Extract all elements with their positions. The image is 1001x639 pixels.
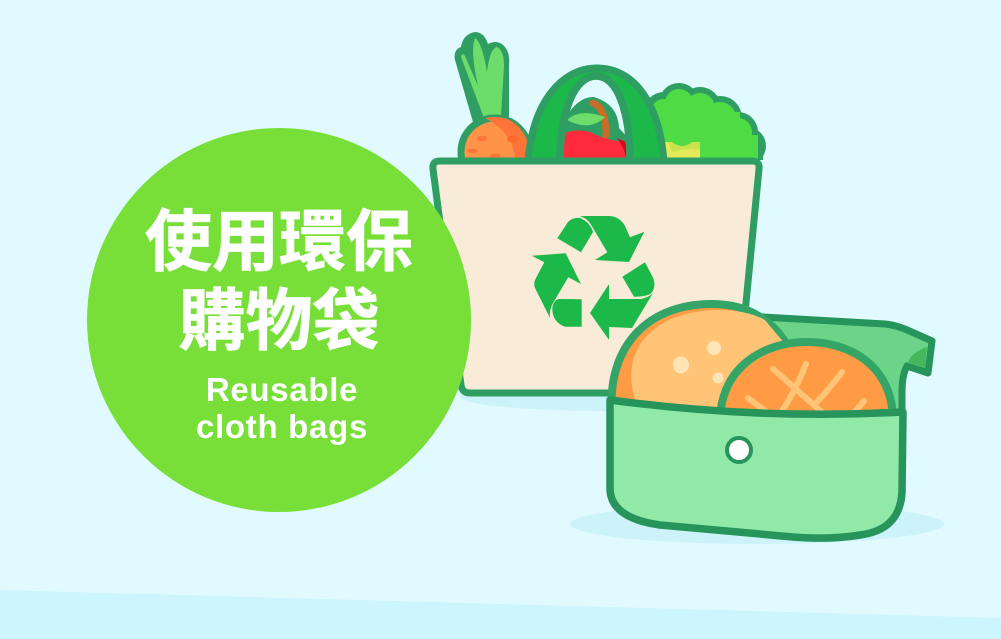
bag shadow [460, 383, 760, 411]
pouch shadow [570, 504, 944, 544]
floor band [0, 590, 1001, 639]
icon: round bread [612, 304, 790, 420]
icon: melon bread [720, 342, 893, 416]
icon: recycle symbol [532, 216, 654, 340]
icon: shopping bag with vegetables [433, 32, 766, 393]
title: 購物袋 [178, 284, 380, 359]
subtitle [196, 371, 368, 445]
title: 使用環保 [145, 205, 413, 280]
title [145, 205, 413, 359]
icon: cloth pouch with bread [610, 304, 932, 538]
pouch front pocket [610, 400, 903, 538]
subtitle: Reusable [206, 371, 358, 408]
panel: bag body [433, 161, 759, 393]
panel: title circle [87, 128, 471, 512]
pouch back flap [760, 317, 932, 412]
subtitle: cloth bags [196, 408, 368, 445]
icon: bag handle [528, 68, 664, 162]
icon: apple [564, 97, 626, 158]
icon: carrot [454, 32, 528, 158]
icon: snap button [727, 438, 751, 462]
icon: lettuce [650, 83, 766, 160]
